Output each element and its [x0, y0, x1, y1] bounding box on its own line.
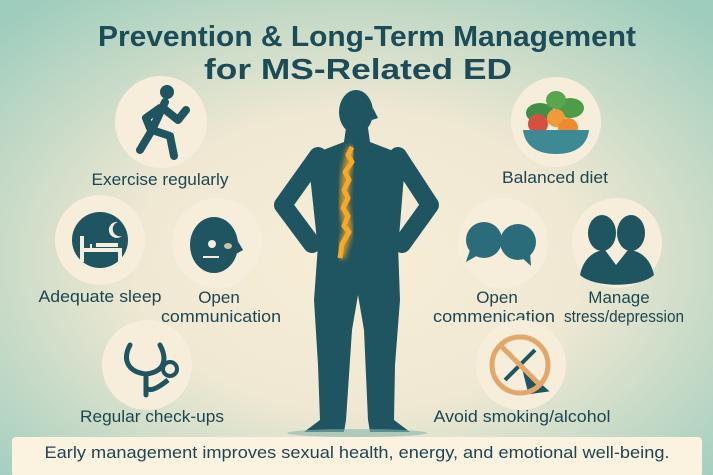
title: for MS-Related ED: [204, 54, 512, 86]
item: open communication (right): Open: [476, 288, 518, 307]
item: regular check-ups: Regular check-ups: [80, 407, 224, 426]
item: adequate sleep: Adequate sleep: [38, 287, 162, 306]
title: [98, 21, 636, 86]
item: regular check-ups: [80, 320, 224, 426]
item: open communication (left): [161, 198, 281, 326]
item: exercise regularly: Exercise regularly: [92, 170, 229, 189]
item: open communication (left): communication: [161, 307, 281, 326]
central figure silhouette: [283, 90, 430, 437]
item: manage stress/depression: Manage: [588, 288, 650, 307]
item: exercise regularly: [92, 76, 229, 189]
item: open communication (right): [433, 198, 555, 326]
item: adequate sleep: [38, 195, 162, 306]
item: avoid smoking/alcohol: [434, 320, 610, 426]
item: manage stress/depression: [564, 198, 684, 326]
bottom banner: Early management improves sexual health, energy, and emotional well-being.: [44, 443, 670, 462]
item: manage stress/depression: stress/depression: [564, 307, 684, 326]
title: Prevention & Long-Term Management: [98, 21, 636, 53]
spine highlight: [340, 147, 352, 258]
item: balanced diet: [502, 77, 608, 187]
item: avoid smoking/alcohol: Avoid smoking/alcohol: [434, 407, 610, 426]
item: open communication (left): Open: [198, 288, 240, 307]
bottom banner: [12, 437, 702, 475]
item: open communication (right): commenication: [433, 307, 555, 326]
item: balanced diet: Balanced diet: [502, 168, 608, 187]
